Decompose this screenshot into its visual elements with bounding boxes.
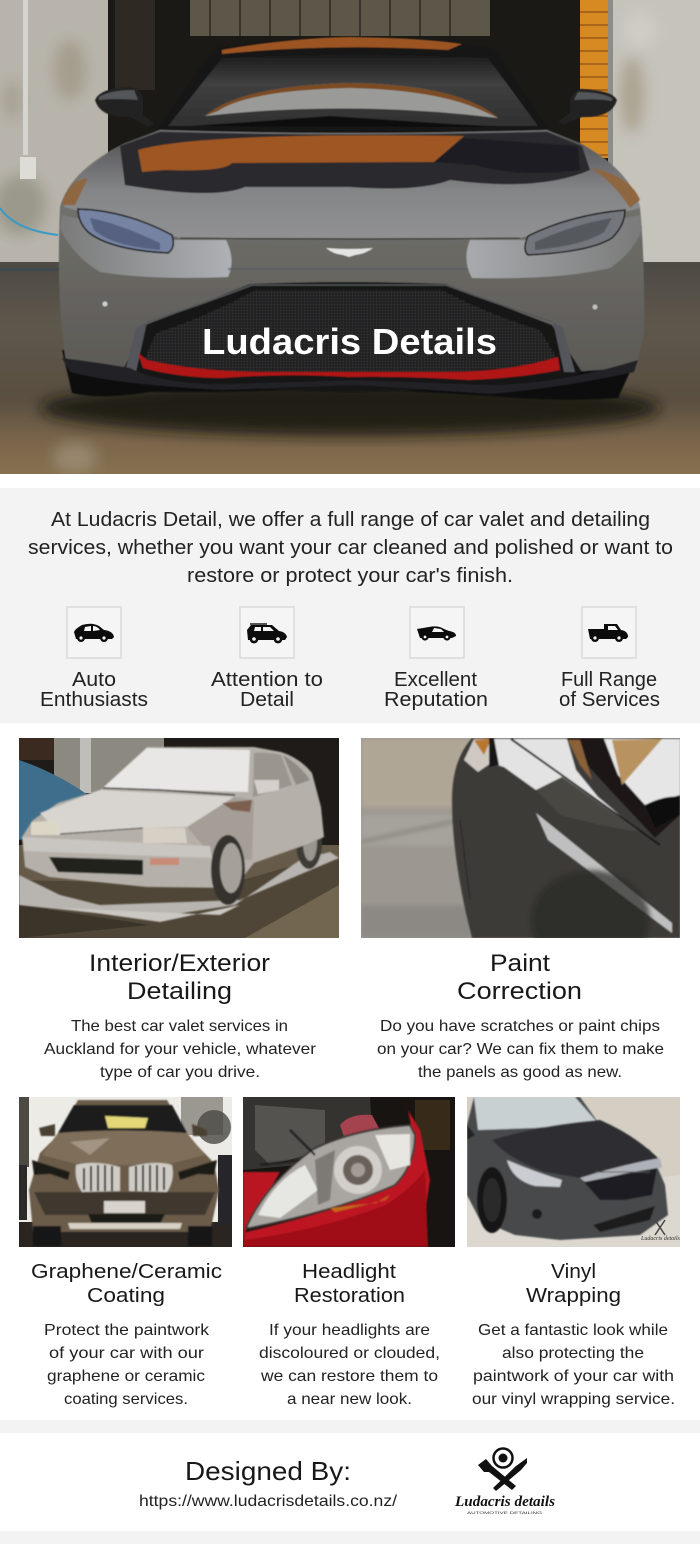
intro paragraph: At Ludacris Detail, we offer a full range of car valet and detailing [51, 509, 650, 531]
label: Enthusiasts [40, 689, 148, 711]
service: headlight restoration [243, 1097, 455, 1408]
description [44, 1018, 317, 1081]
description: of your car with our [49, 1345, 205, 1362]
description: Protect the paintwork [44, 1322, 210, 1339]
footer heading: Designed By: [185, 1456, 351, 1486]
description: on your car? We can fix them to make [377, 1041, 664, 1058]
logo tagline: AUTOMOTIVE DETAILING [467, 1510, 542, 1515]
icon: hatchback [67, 607, 121, 658]
heading: Wrapping [526, 1285, 621, 1307]
description [377, 1018, 664, 1081]
mirrors [95, 87, 155, 127]
website url: https://www.ludacrisdetails.co.nz/ [139, 1493, 398, 1510]
logo wordmark: Ludacris details [454, 1494, 555, 1510]
description: coating services. [64, 1391, 188, 1408]
label [559, 669, 660, 711]
long reflection strip [536, 813, 672, 933]
grille surround [122, 282, 582, 392]
heading: Graphene/Ceramic [31, 1261, 222, 1283]
label [211, 669, 323, 711]
description: Get a fantastic look while [478, 1322, 668, 1339]
roof and windscreen [155, 38, 550, 137]
description: a near new look. [287, 1391, 412, 1408]
description: paintwork of your car with [473, 1368, 674, 1385]
label [40, 669, 148, 711]
label: Auto [72, 669, 116, 691]
label: Attention to [211, 669, 323, 691]
heading: Detailing [127, 978, 232, 1005]
description [44, 1322, 210, 1408]
feature: excellent reputation [384, 607, 488, 711]
label: Detail [240, 689, 294, 711]
hero photo: front of sports car [0, 0, 700, 474]
heading: Coating [87, 1285, 165, 1307]
photo: glossy paint close-up [361, 738, 680, 938]
sensors [102, 302, 108, 306]
body reflections [60, 215, 232, 278]
upper white reflection [491, 739, 640, 832]
grille mesh [144, 290, 558, 374]
front lip [62, 358, 638, 394]
heading [526, 1261, 621, 1307]
description: our vinyl wrapping service. [472, 1391, 675, 1408]
service: vinyl wrapping [467, 1097, 681, 1408]
intro paragraph: restore or protect your car's finish. [187, 565, 513, 587]
heading [294, 1261, 405, 1307]
description: Auckland for your vehicle, whatever [44, 1041, 317, 1058]
heading [457, 950, 582, 1005]
panel: introduction [0, 488, 700, 723]
description: If your headlights are [269, 1322, 430, 1339]
description: Do you have scratches or paint chips [380, 1018, 660, 1035]
feature: attention to detail [211, 607, 323, 711]
intro paragraph: services, whether you want your car cleaned and polished or want to [28, 537, 673, 559]
feature: full range of services [559, 607, 660, 711]
icon: pickup truck [582, 607, 636, 658]
service: graphene/ceramic coating [19, 1097, 232, 1408]
heading: Restoration [294, 1285, 405, 1307]
footer [139, 1448, 555, 1515]
label: Excellent [394, 669, 477, 691]
photo: wrapped dark car: Ludacris details [640, 1236, 681, 1242]
description: discoloured or clouded, [259, 1345, 440, 1362]
intro paragraph [28, 509, 673, 587]
window [566, 738, 680, 838]
logo [454, 1448, 555, 1515]
heading [89, 950, 270, 1005]
description [472, 1322, 675, 1408]
heading: Paint [490, 950, 550, 977]
service: interior/exterior detailing [19, 738, 339, 1081]
label [384, 669, 488, 711]
description [259, 1322, 440, 1408]
red splitter [138, 353, 560, 380]
footer band bottom [0, 1531, 700, 1544]
description: The best car valet services in [71, 1018, 288, 1035]
tyres and lower dark band [62, 350, 640, 400]
heading: Headlight [302, 1261, 396, 1283]
icon: sports car [410, 607, 464, 658]
badge [326, 248, 373, 257]
heading: Correction [457, 978, 582, 1005]
description: also protecting the [502, 1345, 644, 1362]
hood [64, 131, 640, 238]
label: Full Range [561, 669, 657, 691]
footer band top divider [0, 1420, 700, 1433]
title: Ludacris Details [202, 321, 497, 362]
photo: bronze suv [19, 1097, 232, 1247]
photo: wrapped dark car [467, 1097, 681, 1247]
heading: Vinyl [551, 1261, 596, 1283]
heading [31, 1261, 222, 1307]
description: graphene or ceramic [47, 1368, 205, 1385]
photo: foam covered car [19, 738, 339, 938]
description: we can restore them to [260, 1368, 438, 1385]
description: the panels as good as new. [418, 1064, 622, 1081]
description: type of car you drive. [100, 1064, 260, 1081]
heading: Interior/Exterior [89, 950, 270, 977]
main body [59, 130, 644, 378]
photo: red car headlight [243, 1097, 455, 1247]
label: of Services [559, 689, 660, 711]
label: Reputation [384, 689, 488, 711]
headlights [78, 209, 173, 253]
logo icon: crossed detailing tools [478, 1448, 527, 1491]
feature: auto enthusiasts [40, 607, 148, 711]
service: paint correction [361, 738, 680, 1081]
icon: suv [240, 607, 294, 658]
